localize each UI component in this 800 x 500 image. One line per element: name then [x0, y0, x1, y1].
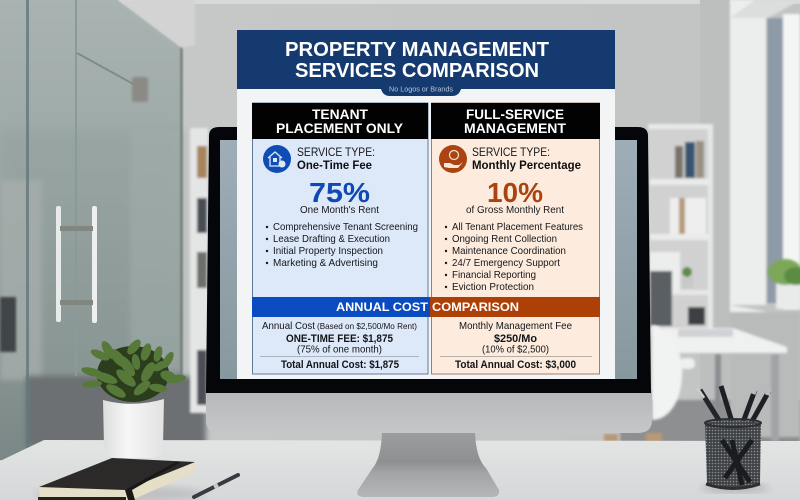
background: glass partition [0, 0, 206, 460]
background: window plant [768, 259, 800, 309]
icon: house with dollar [263, 145, 291, 173]
service type text [297, 147, 375, 172]
title: SERVICES COMPARISON [295, 60, 539, 82]
monitor screen [220, 140, 637, 379]
cost details: $250/Mo [494, 333, 537, 345]
heading: tenant placement: TENANT [312, 106, 368, 122]
heading: full-service: FULL-SERVICE [466, 106, 564, 122]
heading: full-service: MANAGEMENT [464, 120, 566, 136]
service type text: One-Time Fee [297, 160, 372, 172]
title: PROPERTY MANAGEMENT [285, 39, 549, 61]
heading: tenant placement [252, 103, 428, 139]
desk surface [0, 440, 800, 500]
cost details: Total Annual Cost: $3,000 [455, 359, 576, 371]
monitor bezel [206, 127, 651, 393]
cost details: (Based on $2,500/Mo Rent) [317, 321, 417, 331]
stat: 10%: of Gross Monthly Rent [466, 204, 564, 216]
cost details: (10% of $2,500) [482, 344, 549, 356]
monitor [206, 127, 652, 497]
stat: 75%: One Month's Rent [300, 204, 379, 216]
feature list: Initial Property Inspection [273, 245, 383, 257]
feature list: All Tenant Placement Features [452, 221, 583, 233]
stat: 10%: 10% [487, 177, 543, 208]
notebook [35, 458, 205, 500]
pen holder [697, 386, 769, 493]
feature list: Financial Reporting [452, 269, 536, 281]
subtitle pill: No Logos or Brands [389, 86, 454, 94]
cost details: Annual Cost [262, 320, 315, 332]
plant pot [103, 399, 164, 458]
header banner [237, 30, 615, 96]
heading: full-service [431, 103, 600, 139]
stat: 10% [466, 177, 564, 216]
feature list [445, 221, 583, 293]
pen [194, 475, 238, 497]
feature list: Eviction Protection [452, 281, 534, 293]
feature list: Marketing & Advertising [273, 257, 378, 269]
panel: tenant placement only [252, 103, 428, 374]
potted plant [80, 337, 187, 458]
annual cost comparison band: COMPARISON [432, 300, 519, 314]
feature list: Ongoing Rent Collection [452, 233, 557, 245]
service type text: SERVICE TYPE: [297, 147, 375, 159]
feature list: Lease Drafting & Execution [273, 233, 390, 245]
title [285, 39, 549, 82]
cost details: ONE-TIME FEE: $1,875 [286, 333, 393, 345]
feature list: Maintenance Coordination [452, 245, 566, 257]
service type text [472, 147, 581, 172]
panel: full-service management [431, 103, 600, 374]
background: left bookshelf [190, 128, 208, 413]
service type text: Monthly Percentage [472, 160, 581, 172]
cost details [440, 320, 592, 371]
background: white table and chair [604, 325, 787, 442]
pens [697, 386, 769, 425]
feature list: 24/7 Emergency Support [452, 257, 560, 269]
feature list [266, 221, 418, 269]
mesh cup [705, 419, 761, 488]
service type text: SERVICE TYPE: [472, 147, 550, 159]
cost details: (75% of one month) [297, 344, 382, 356]
stat: 75% [300, 177, 379, 216]
icon: hand with coin [439, 145, 467, 173]
background: window [730, 0, 800, 437]
cost details [260, 320, 419, 371]
annual cost comparison band [252, 297, 600, 317]
infographic card [237, 30, 615, 379]
annual cost comparison band: ANNUAL COST [336, 300, 429, 314]
cost details: Total Annual Cost: $1,875 [281, 359, 399, 371]
background: right bookshelf [648, 124, 713, 336]
feature list: Comprehensive Tenant Screening [273, 221, 418, 233]
stat: 75%: 75% [309, 177, 370, 208]
heading: tenant placement: PLACEMENT ONLY [276, 120, 404, 136]
monitor chin [206, 390, 652, 433]
plant foliage [80, 337, 187, 402]
monitor stand [357, 433, 499, 497]
cost details: Monthly Management Fee [459, 320, 572, 332]
